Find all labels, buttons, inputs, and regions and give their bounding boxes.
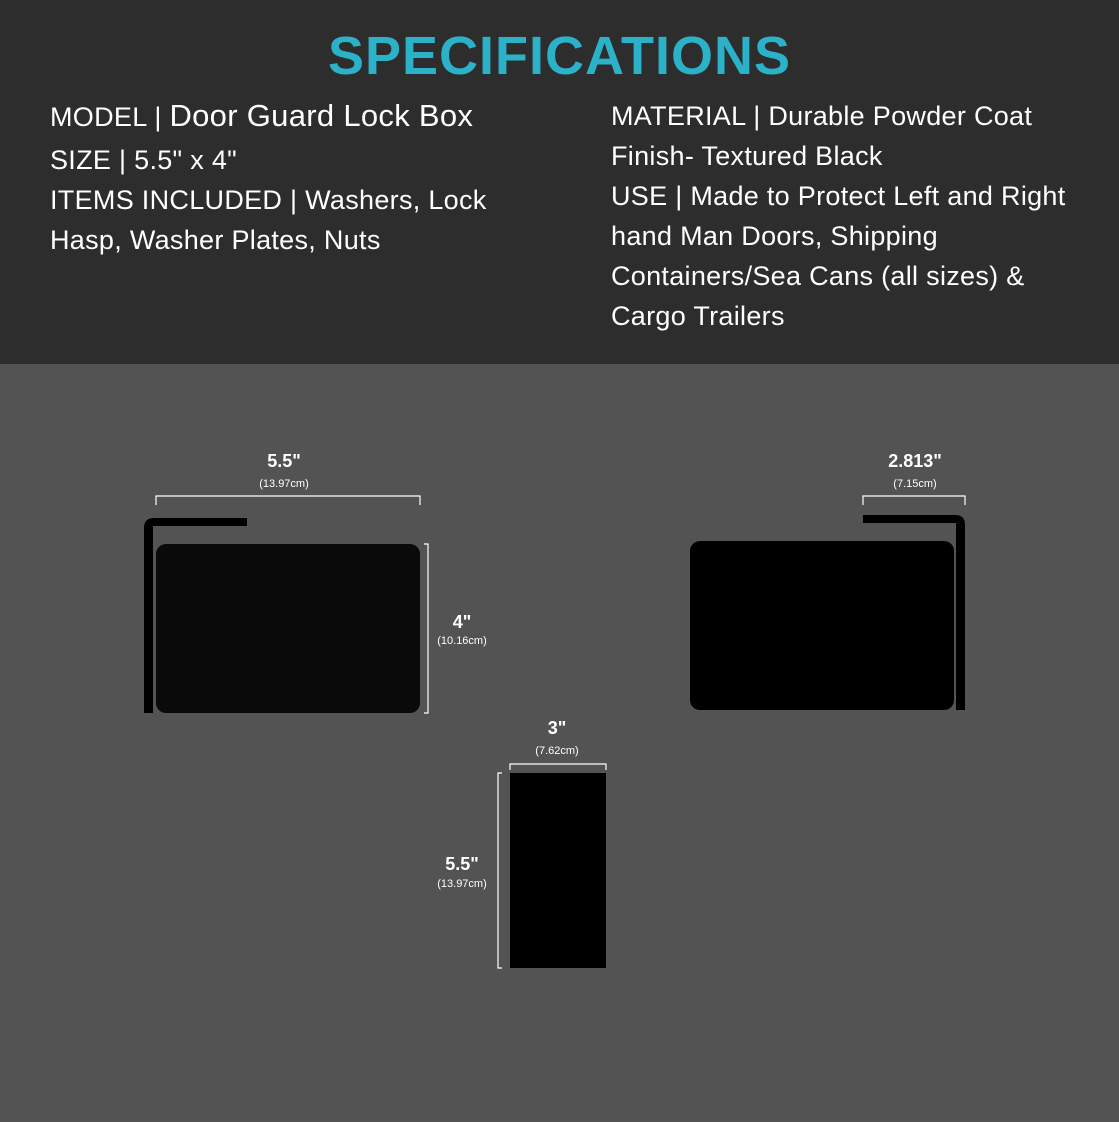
text block: left specs [50,98,487,255]
side view [690,451,965,710]
text block: left specs: SIZE | 5.5" x 4" [50,145,237,175]
top view: (7.62cm) [535,745,579,757]
side view: 2.813" [888,451,942,471]
side view: (7.15cm) [893,478,937,490]
text block: left specs: MODEL | Door Guard Lock Box [50,98,473,133]
text block: right specs: MATERIAL | Durable Powder Coat Finish- Textured Black [611,101,1032,171]
top view: 5.5" [445,854,479,874]
text block: left specs: ITEMS INCLUDED | Washers, Lock Hasp, Washer Plates, Nuts [50,185,487,255]
text block: right specs: USE | Made to Protect Left and Right hand Man Doors, Shipping Containers/Sea Cans (all sizes) & Cargo Trailers [611,181,1066,331]
front view: 4" [453,612,471,632]
header panel [0,0,1119,364]
top view [437,718,606,968]
title: SPECIFICATIONS [328,26,791,86]
front view: (10.16cm) [437,635,487,647]
text block: right specs [611,101,1066,331]
top view: (13.97cm) [437,878,487,890]
front view: 5.5" [267,451,301,471]
top view: 3" [548,718,566,738]
front view: (13.97cm) [259,478,309,490]
front view [144,451,487,713]
